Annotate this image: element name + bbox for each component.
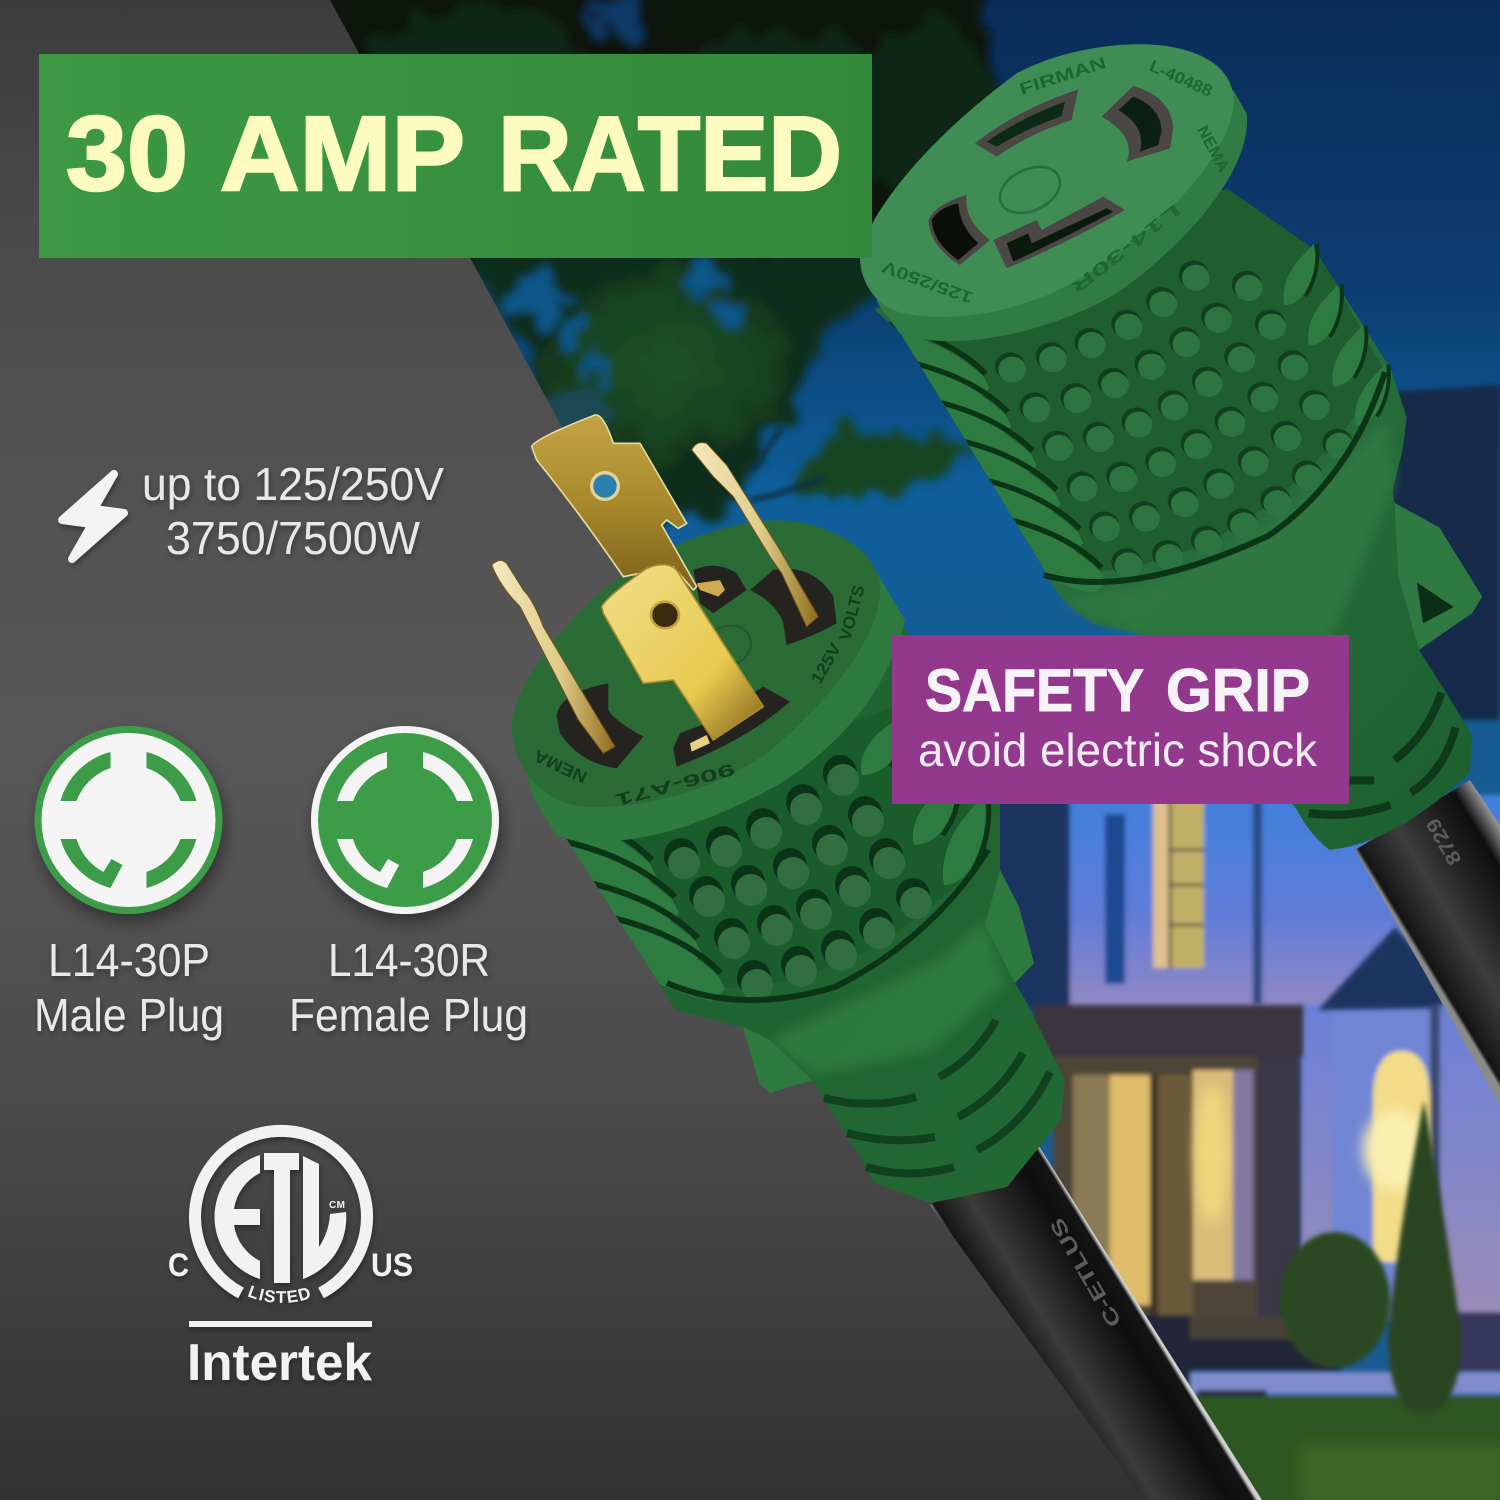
porch	[1033, 1005, 1340, 1500]
gable roof	[1318, 927, 1460, 1010]
female triangle marker	[1417, 583, 1454, 623]
male right ribs	[861, 715, 989, 885]
female cord printed text: 8729	[1422, 814, 1466, 868]
male plug cord	[930, 1140, 1262, 1500]
male slots, lettering and blades	[492, 415, 868, 810]
female collar shading	[1060, 420, 1395, 640]
female plug label	[289, 934, 528, 1041]
female face rim	[860, 90, 1247, 341]
male left ribs	[566, 838, 725, 1001]
male face rim	[515, 575, 905, 841]
female plug cord	[1355, 780, 1500, 1105]
female slots and lettering: FIRMAN	[1017, 53, 1108, 99]
banner title: 30	[66, 95, 188, 213]
wattage text: 3750/7500W	[166, 512, 421, 564]
male collar highlight	[770, 920, 1005, 1075]
female left ribs	[876, 322, 1105, 593]
lower right wall	[1300, 1005, 1500, 1372]
CM mark: CM	[329, 1200, 345, 1211]
male side bumps	[743, 870, 1034, 1093]
LISTED arc text: LISTED	[248, 1286, 310, 1304]
house upper wall	[985, 795, 1500, 1010]
house roof	[1385, 385, 1500, 720]
female body and neck	[874, 189, 1482, 850]
female grip zone	[896, 188, 1382, 572]
male slots, lettering and blades: 125V	[807, 640, 845, 687]
Intertek wordmark: Intertek	[187, 1334, 372, 1392]
divider rule	[189, 1321, 372, 1327]
male cord printed text: C-ETLUS	[1046, 1214, 1126, 1330]
female plug label: L14-30R	[328, 934, 490, 986]
male plug label	[34, 934, 224, 1041]
male band	[667, 850, 988, 1000]
gray diagonal panel	[0, 0, 1145, 1500]
callout heading: SAFETY	[925, 657, 1144, 724]
voltage spec	[62, 458, 444, 564]
female slots and lettering: 125/250V	[880, 257, 975, 307]
banner title: AMP	[220, 95, 465, 213]
male neck vents	[824, 1020, 1050, 1174]
male slots, lettering and blades: VOLTS	[835, 583, 868, 643]
ETL letters	[215, 1153, 346, 1283]
male plug	[492, 415, 1065, 1203]
male plug label: Male Plug	[34, 989, 224, 1041]
female dimples	[995, 244, 1389, 578]
female face	[860, 44, 1234, 317]
male grip zone	[621, 709, 988, 972]
title banner	[39, 54, 872, 258]
ETL ring	[195, 1131, 367, 1293]
safety grip callout	[892, 635, 1349, 804]
female slots and lettering: L14-30R	[1067, 200, 1184, 297]
icon: lightning bolt	[62, 474, 124, 559]
banner background	[39, 54, 872, 258]
callout heading	[925, 657, 1310, 724]
male slots, lettering and blades: NEMA	[531, 746, 590, 787]
male face	[512, 520, 880, 807]
C mark: C	[168, 1247, 189, 1283]
banner title	[66, 95, 842, 213]
female plug	[860, 44, 1482, 850]
female bump	[1394, 503, 1482, 650]
tree branches	[750, 428, 825, 500]
callout heading: GRIP	[1166, 657, 1310, 724]
icon: L14-30R female plug	[311, 726, 499, 914]
female slots and lettering: L-40488	[1147, 56, 1215, 101]
callout subtext: avoid electric shock	[918, 724, 1318, 776]
ETL Intertek certification logo	[168, 1124, 413, 1392]
female slots and lettering	[880, 53, 1233, 307]
lawn	[1150, 1372, 1500, 1500]
banner title: RATED	[498, 95, 842, 213]
female neck vents	[1309, 693, 1456, 815]
callout background	[892, 635, 1349, 804]
icon: L14-30P male plug	[34, 726, 222, 914]
tree foliage	[320, 0, 990, 530]
female slots and lettering: NEMA	[1193, 122, 1233, 175]
male body and neck	[533, 590, 1065, 1203]
female plug label: Female Plug	[289, 989, 528, 1041]
male dimples	[664, 755, 932, 1001]
voltage text: up to 125/250V	[142, 458, 444, 510]
male plug label: L14-30P	[48, 934, 210, 986]
US mark: US	[371, 1247, 413, 1283]
male slots, lettering and blades: 906-A71	[613, 759, 737, 810]
female band groove	[1044, 372, 1385, 582]
shrubs	[1280, 1100, 1462, 1414]
